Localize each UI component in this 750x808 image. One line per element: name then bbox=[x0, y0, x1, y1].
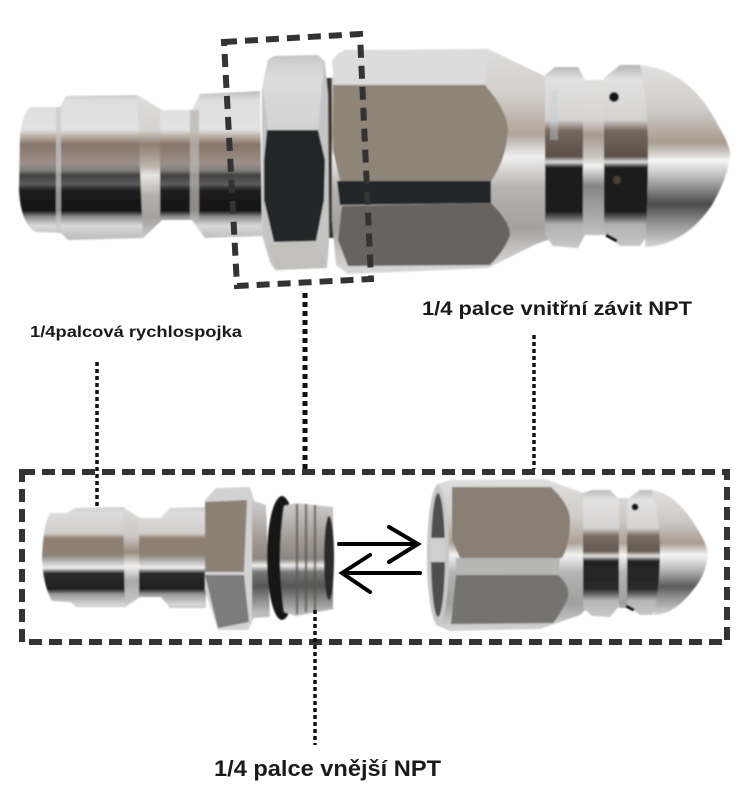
nozzle body (bottom) bbox=[427, 479, 587, 631]
dotted connector: selection to exploded view bbox=[302, 293, 308, 470]
hex section bbox=[205, 487, 254, 630]
exploded nozzle bbox=[427, 479, 708, 631]
dotted connector: male thread label bbox=[313, 610, 317, 745]
label: quick coupler: 1/4palcová rychlospojka bbox=[30, 324, 242, 341]
label: 1/4 inch male NPT: 1/4 palce vnější NPT bbox=[214, 756, 442, 781]
dotted connector: female thread label bbox=[532, 335, 536, 469]
O-ring bbox=[267, 496, 297, 620]
label: 1/4 inch female NPT: 1/4 palce vnitřní závit NPT bbox=[422, 298, 692, 320]
quick coupler body (top) bbox=[19, 91, 262, 240]
collar bbox=[252, 500, 270, 618]
nozzle dome (top) bbox=[640, 65, 730, 247]
nozzle opening bbox=[427, 485, 449, 625]
assembled nozzle photo (top) bbox=[19, 49, 730, 274]
icon: spray holes bbox=[626, 504, 638, 610]
dashed selection around joint bbox=[224, 34, 371, 286]
exploded coupler with male thread bbox=[42, 487, 334, 630]
arrow: left bbox=[342, 555, 420, 592]
nozzle rings bbox=[545, 65, 648, 248]
dotted connector: coupler label bbox=[95, 362, 99, 506]
gap between hex nut and nozzle bbox=[324, 78, 334, 238]
nozzle body (top) bbox=[332, 49, 548, 274]
male thread bbox=[280, 503, 334, 616]
icon: spray holes bbox=[606, 92, 621, 241]
coupler body (bottom) bbox=[42, 507, 206, 608]
dashed frame around exploded view bbox=[22, 472, 727, 642]
nozzle dome (bottom) bbox=[652, 490, 708, 615]
hex nut bbox=[262, 55, 329, 270]
arrow: right bbox=[339, 527, 418, 562]
nozzle rings bbox=[583, 490, 660, 617]
